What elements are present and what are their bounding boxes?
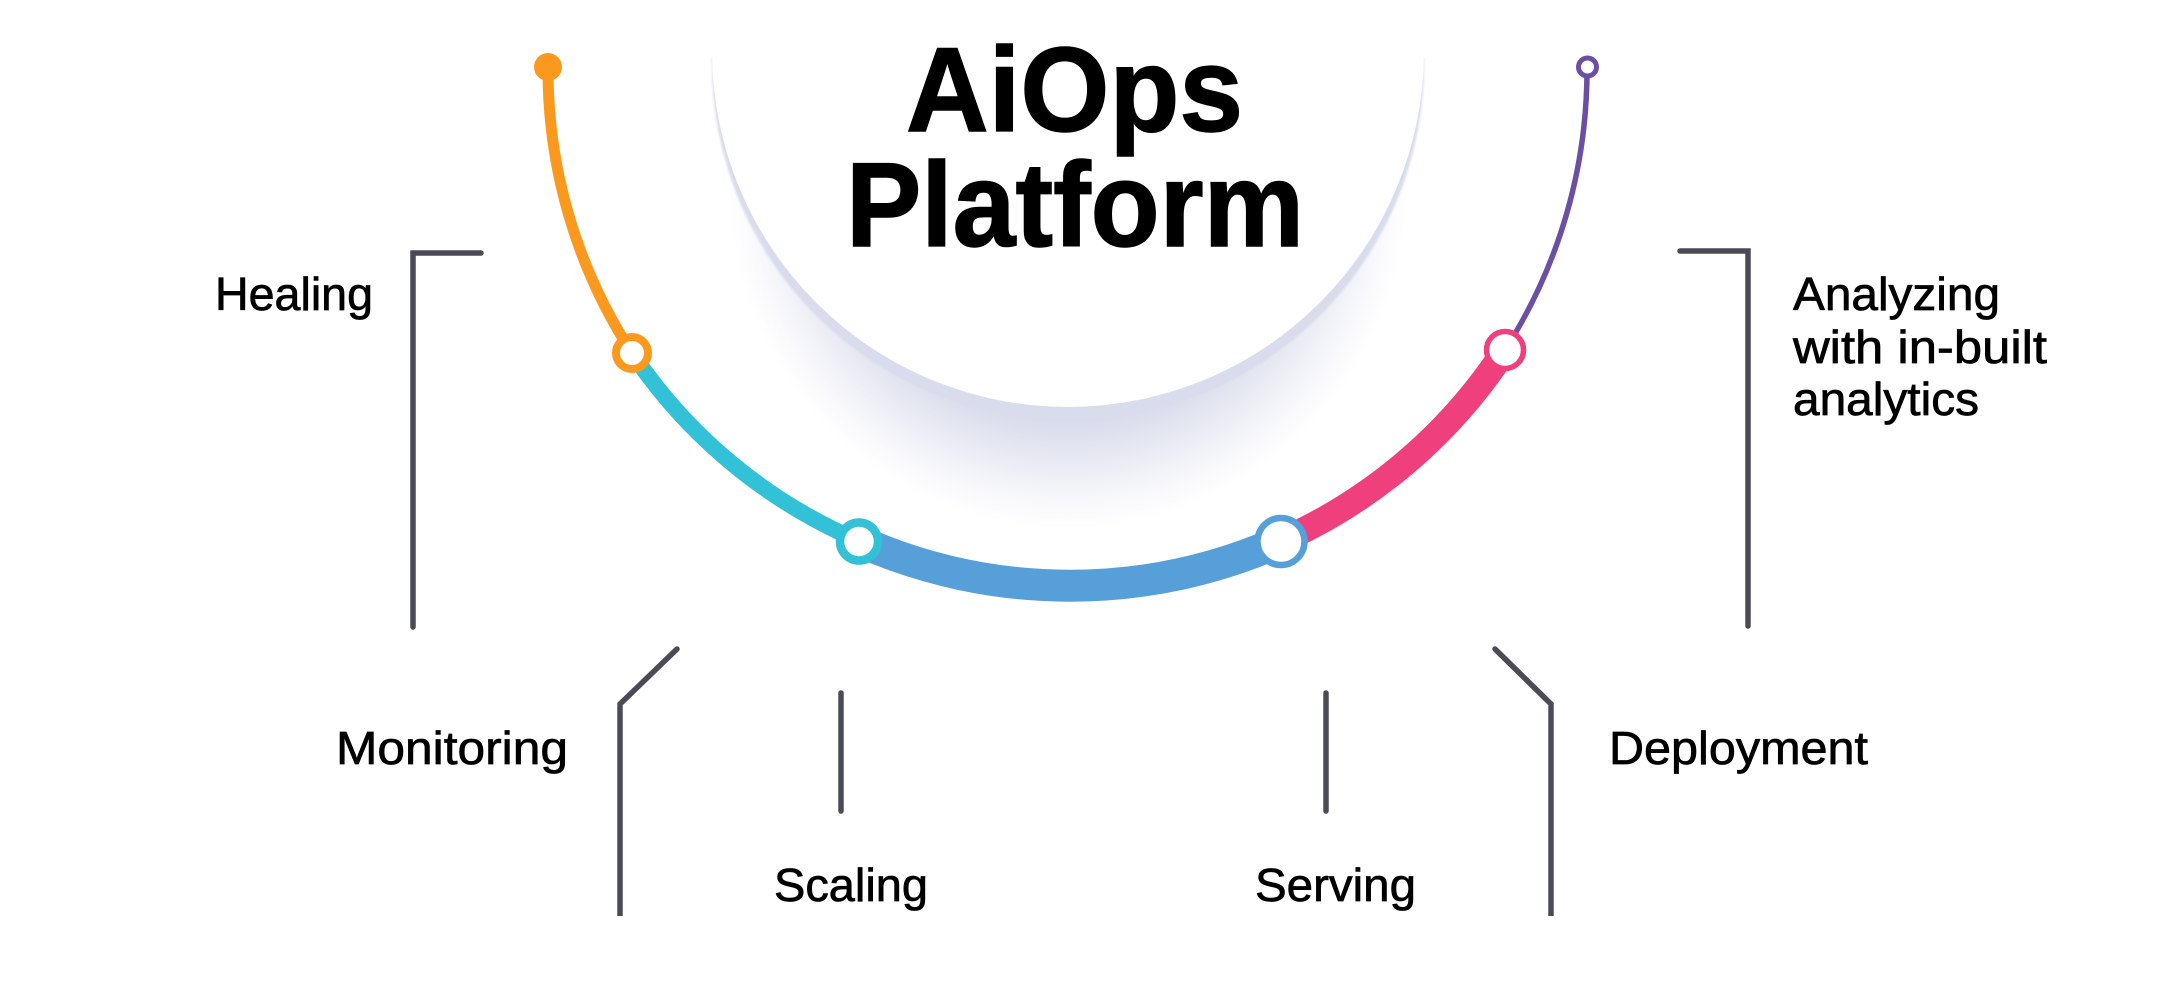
arc segment: purple analyzing bbox=[1505, 66, 1587, 350]
node: pink ring bbox=[1486, 332, 1524, 368]
title bbox=[846, 23, 1304, 272]
connector: healing bracket bbox=[413, 253, 481, 627]
label: Analyzing with in-built analytics bbox=[1792, 268, 2047, 425]
label: Analyzing with in-built analytics: Analyzing bbox=[1793, 268, 2000, 320]
node: blue ring bbox=[1258, 518, 1304, 565]
connector: scaling line bbox=[838, 693, 844, 811]
label: Monitoring: Monitoring bbox=[336, 722, 568, 774]
label: Deployment: Deployment bbox=[1609, 722, 1868, 774]
semicircular arc with coloured segments bbox=[548, 66, 1587, 586]
arc segment: orange healing bbox=[548, 66, 632, 353]
central white circle with shadow bbox=[711, 57, 1425, 500]
node: orange ring bbox=[616, 337, 648, 369]
label: Analyzing with in-built analytics: analytics bbox=[1793, 373, 1979, 425]
node: purple end ring bbox=[1578, 58, 1596, 76]
label: Scaling: Scaling bbox=[774, 859, 928, 911]
arc segment: pink deployment bbox=[1281, 350, 1505, 541]
connector: serving line bbox=[1323, 693, 1329, 811]
connector: analyzing bracket bbox=[1680, 251, 1748, 626]
label: Serving: Serving bbox=[1255, 859, 1416, 911]
node: cyan ring bbox=[840, 522, 878, 560]
mask: line cut-off at bottom bbox=[600, 916, 1570, 946]
node: orange start dot bbox=[534, 53, 562, 81]
arc segment: cyan monitoring bbox=[632, 353, 859, 541]
connector: deployment bracket bbox=[1495, 649, 1551, 925]
label: Healing: Healing bbox=[215, 268, 373, 320]
arc segment: blue scaling and serving bbox=[859, 541, 1281, 586]
connector: monitoring bracket bbox=[620, 649, 677, 925]
label: Analyzing with in-built analytics: with in-built bbox=[1792, 321, 2047, 373]
title: AiOps bbox=[906, 23, 1243, 157]
title: Platform bbox=[846, 138, 1304, 272]
